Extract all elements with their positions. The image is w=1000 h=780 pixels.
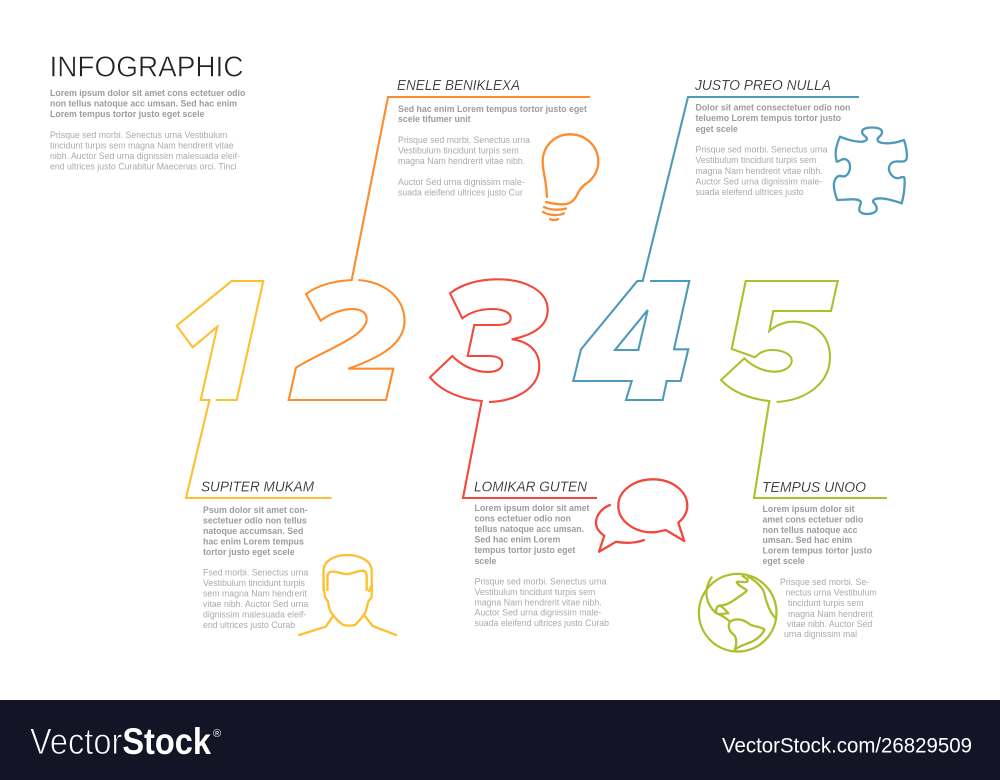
bold text: Sed hac enim Lorem [474,534,560,544]
icon: puzzle piece [834,128,907,214]
body text: magna Nam hendrerit vitae nibh. [696,166,823,176]
body text: Vestibulum tincidunt turpis sem [474,587,595,597]
title: INFOGRAPHIC [50,52,244,84]
body text [696,144,828,197]
body text: Vestibulum tincidunt turpis sem [696,155,816,165]
title block [50,52,246,172]
body text: Prisque sed morbi. Senectus urna [398,135,530,145]
body text: urna dignissim mal [784,629,857,639]
intro bold text: Lorem ipsum dolor sit amet cons ectetuer odio [50,88,246,98]
body text: Prisque sed morbi. Senectus urna [696,144,828,154]
bold text: scele tifumer unit [398,114,471,124]
body text: Vestibulum tincidunt turpis sem [398,146,519,156]
body text: sem magna Nam hendrerit [203,588,307,598]
bold text: non tellus natoque acc [762,525,858,535]
body text: Auctor Sed urna dignissim male- [474,608,601,618]
intro body text [50,130,240,172]
bold text: cons ectetuer odio non [474,514,571,524]
body text: Prisque sed morbi. Se- [780,577,869,587]
panel: justo preo nulla [694,78,907,214]
body text: Prisque sed morbi. Senectus urna [474,576,607,586]
bold text: Lorem tempus tortor justo [762,546,873,556]
body text: suada eleifend ultrices justo Curab [474,618,609,628]
bold text [762,504,873,566]
bold text: sectetuer odio non tellus [203,516,307,526]
bold text: teluemo Lorem tempus tortor justo [696,113,842,123]
body text: vitae nibh. Auctor Sed [787,619,872,629]
intro bold text [50,88,246,119]
bold text: Dolor sit amet consectetuer odio non [696,102,850,112]
bold text: amet cons ectetuer odio [762,514,864,524]
bold text: Lorem ipsum dolor sit [762,504,855,514]
digit 3 [430,279,597,498]
bold text: tellus natoque acc umsan. [474,524,584,534]
bold text: hac enim Lorem tempus [203,536,304,546]
body text: Auctor Sed urna dignissim male- [696,176,822,186]
icon: globe [699,574,776,652]
panel: enele beniklexa [397,78,598,220]
body text: tincidunt turpis sem [788,598,864,608]
footer bar [0,700,1000,780]
bold text: eget scele [762,556,805,566]
numeral 5 with connector [721,281,887,498]
body text: nectus urna Vestibulum [786,588,877,598]
body text: Fsed morbi. Senectus urna [203,568,308,578]
icon: light bulb [543,134,598,220]
body text [398,135,530,198]
numeral 2 with connector [289,97,590,400]
digit 1 [177,281,332,498]
panel: tempus unoo [699,480,877,652]
bold text: Lorem ipsum dolor sit amet [474,503,590,513]
footer background [0,700,1000,780]
intro body text: tincidunt turpis sem magna Nam hendrerit vitae [50,140,234,150]
bold text: umsan. Sed hac enim [762,535,852,545]
bold text [696,102,850,134]
bold text: Psum dolor sit amet con- [203,505,308,515]
bold text [398,104,587,124]
body text [780,577,877,639]
digit 5 [721,281,887,498]
body text: Auctor Sed urna dignissim male- [398,177,525,187]
body text: end ultrices justo Curab [203,620,295,630]
body text: magna Nam hendrerit vitae nibh. [398,156,525,166]
intro body text: Prisque sed morbi. Senectus urna Vestibulum [50,130,227,140]
body text [474,576,609,628]
heading: ENELE BENIKLEXA [397,78,520,94]
bold text: tortor justo eget scele [203,547,295,557]
heading: LOMIKAR GUTEN [474,480,588,496]
body text: Vestibulum tincidunt turpis [203,578,305,588]
numeral 3 with connector [430,279,597,498]
bold text: tempus tortor justo eget [474,545,575,555]
body text: suada eleifend ultrices justo [696,187,804,197]
digit 2 [289,97,590,400]
intro bold text: non tellus natoque acc umsan. Sed hac enim [50,98,237,108]
digit 4 [573,97,859,400]
intro body text: end ultrices justo Curabitur Maecenas orci. Tinci [50,162,237,172]
body text: magna Nam hendrerit [788,609,873,619]
body text: dignissim malesuada eleif- [203,610,306,620]
icon: speech bubbles [596,479,687,552]
intro bold text: Lorem tempus tortor justo eget scele [50,109,205,119]
bold text: Sed hac enim Lorem tempus tortor justo eget [398,104,587,114]
body text [203,568,308,630]
bold text [474,503,590,566]
panel: supiter mukam [201,480,396,635]
bold text: scele [474,556,497,566]
digit 4 counter [615,310,648,350]
registered mark: ® [213,728,221,740]
bold text: natoque accumsan. Sed [203,526,303,536]
bold text: eget scele [696,124,738,134]
body text: suada eleifend ultrices justo Cur [398,188,523,198]
intro body text: nibh. Auctor Sed urna dignissim malesuada eleif- [50,151,240,161]
heading: JUSTO PREO NULLA [694,78,831,94]
image id: VectorStock.com/26829509 [722,734,972,758]
numeral 4 with connector [573,97,859,400]
heading: TEMPUS UNOO [762,480,866,496]
icon: person [299,555,396,635]
heading: SUPITER MUKAM [201,480,314,496]
body text: magna Nam hendrerit vitae nibh. [474,598,602,608]
numeral 1 with connector [177,281,332,498]
bold text [203,505,308,557]
brand logo: VectorStock [30,721,211,762]
body text: vitae nibh. Auctor Sed urna [203,599,308,609]
panel: lomikar guten [474,479,687,628]
